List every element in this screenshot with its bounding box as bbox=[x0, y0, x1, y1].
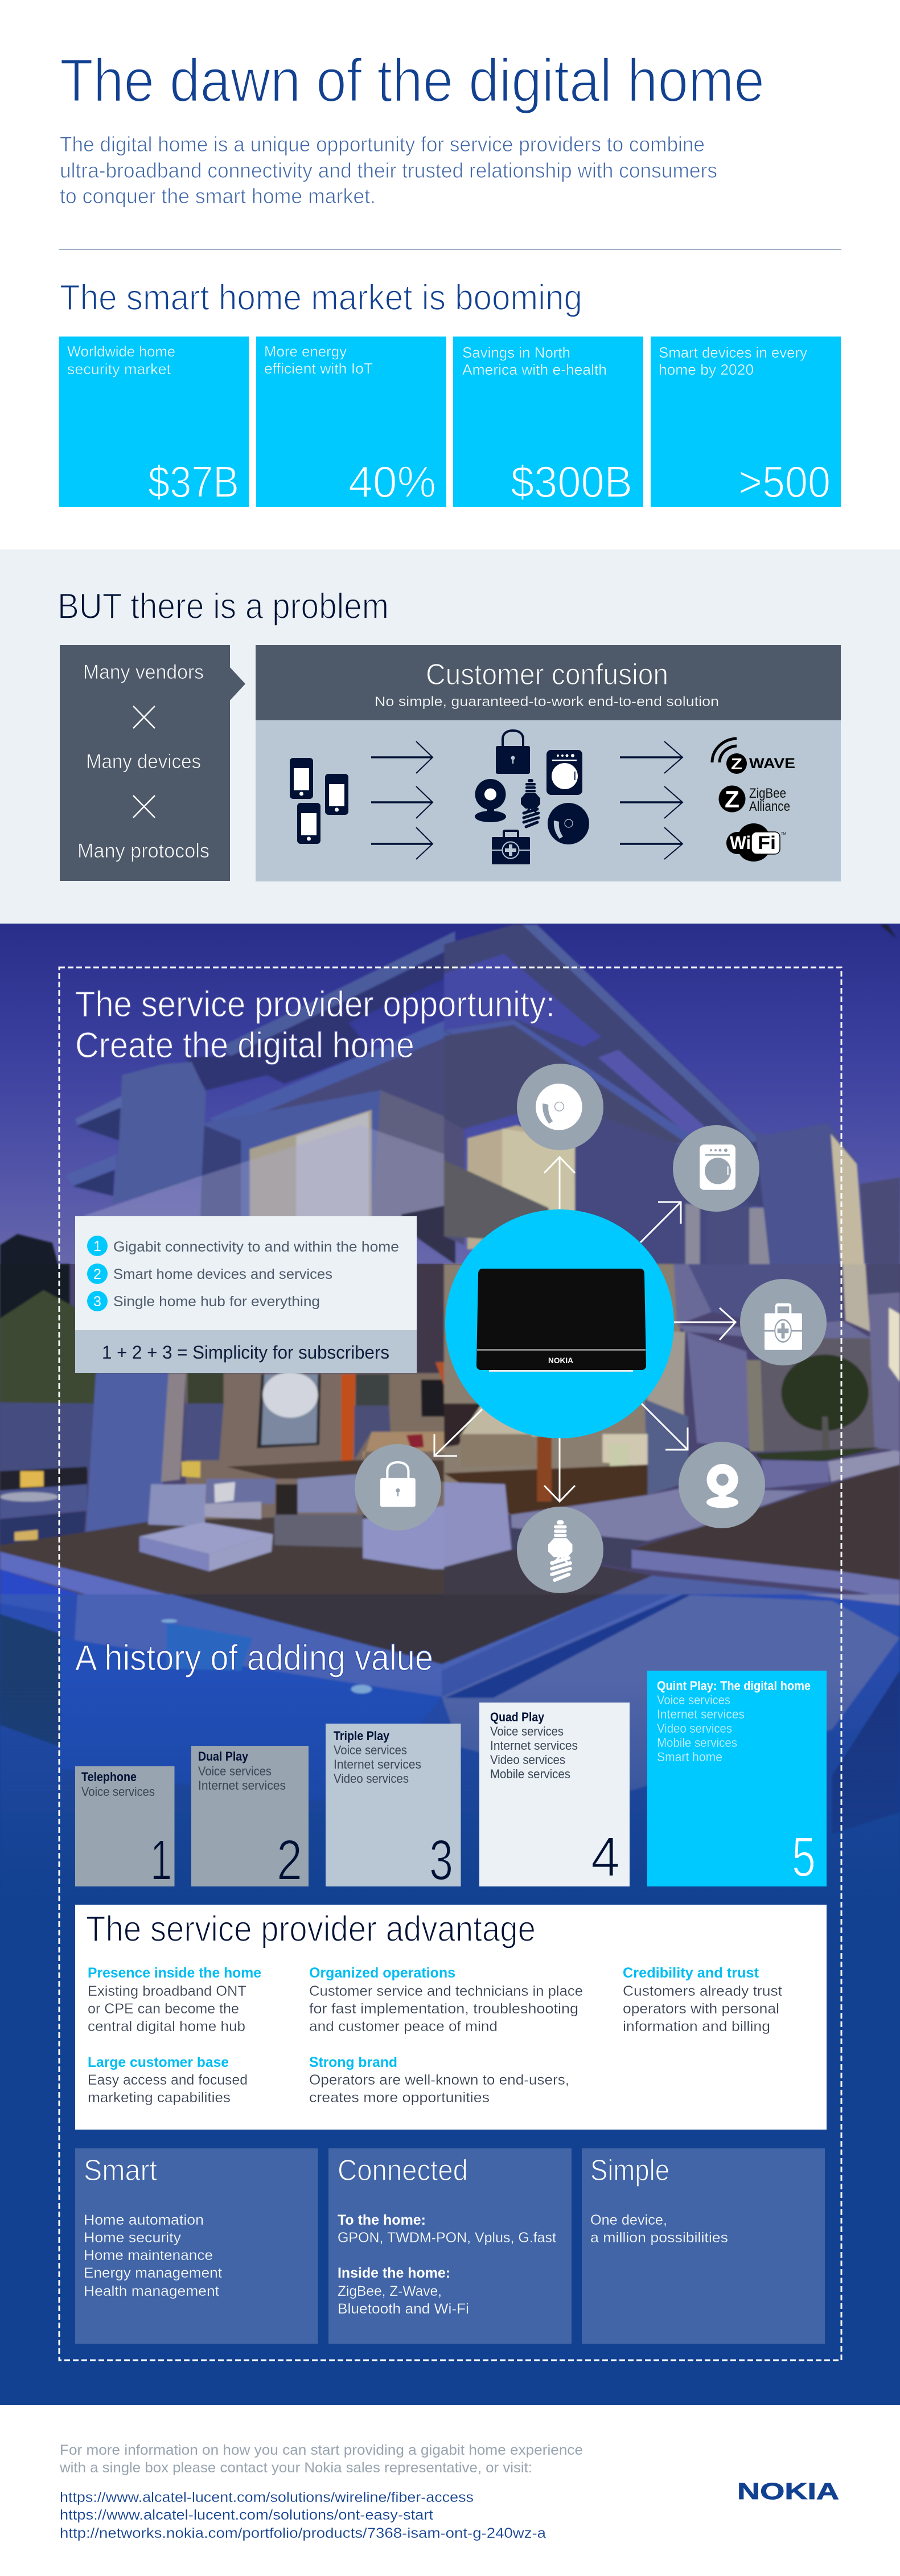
item: organized operations: and customer peace of mind bbox=[309, 2019, 498, 2034]
list item 2: Smart home devices and services bbox=[113, 1266, 332, 1282]
step 2: dual play: Internet services bbox=[198, 1778, 286, 1792]
tile: energy: More energy bbox=[264, 343, 347, 360]
heading: history of adding value: A history of adding value bbox=[75, 1638, 433, 1678]
item: credibility and trust: Customers already trust bbox=[623, 1983, 782, 1999]
heading: advantage: The service provider advantage bbox=[86, 1909, 536, 1949]
panel: simple: One device, bbox=[590, 2212, 667, 2228]
list item 3 bbox=[87, 1291, 320, 1311]
step 4: quad play: Voice services bbox=[490, 1724, 564, 1738]
icon: phones bbox=[290, 758, 348, 844]
logo: ZigBee Alliance bbox=[718, 786, 790, 814]
step 3: triple play bbox=[326, 1724, 461, 1892]
step 5: quint play: Mobile services bbox=[657, 1736, 737, 1750]
step 3: triple play: Video services bbox=[334, 1771, 409, 1786]
step 1: telephone: Telephone bbox=[81, 1770, 137, 1784]
step 4: quad play: Internet services bbox=[490, 1738, 578, 1753]
item: organized operations bbox=[309, 1965, 583, 2034]
item: large customer base: Easy access and focused bbox=[88, 2072, 248, 2088]
step 5: quint play: Quint Play: The digital home bbox=[657, 1679, 811, 1693]
footer: links: https://www.alcatel-lucent.com/solutions/wireline/fiber-access bbox=[60, 2489, 474, 2505]
item: credibility and trust bbox=[623, 1965, 782, 2034]
panel: connected: To the home: bbox=[338, 2212, 426, 2228]
box: many vendors, devices, protocols: Many devices bbox=[86, 750, 201, 773]
step 1: telephone bbox=[75, 1766, 174, 1892]
panel: connected: Inside the home: bbox=[338, 2265, 450, 2281]
icon: medical kit bbox=[740, 1279, 827, 1365]
footer: contact note: For more information on how you can start providing a gigabit home experience bbox=[60, 2442, 583, 2458]
step 1: telephone: 1 bbox=[150, 1828, 172, 1892]
tile: security market: security market bbox=[67, 360, 171, 378]
panel: smart: Smart bbox=[84, 2154, 158, 2187]
panel: smart: Health management bbox=[84, 2283, 219, 2299]
item: credibility and trust: Credibility and trust bbox=[623, 1965, 759, 1981]
step 5: quint play: Smart home bbox=[657, 1750, 722, 1764]
diagram: vendors, devices and protocols bbox=[256, 720, 841, 881]
intro paragraph: The digital home is a unique opportunity for service providers to combine bbox=[60, 133, 705, 156]
title: The dawn of the digital home bbox=[60, 46, 765, 114]
tile: smart devices: Smart devices in every bbox=[659, 344, 807, 361]
logo: ZigBee Alliance: ZigBee bbox=[749, 786, 786, 801]
tile: security market bbox=[59, 337, 249, 507]
item: large customer base bbox=[88, 2054, 248, 2106]
item: presence inside the home: Existing broadband ONT bbox=[88, 1983, 246, 1999]
step 5: quint play bbox=[647, 1671, 827, 1888]
intro paragraph bbox=[60, 133, 717, 208]
tile: smart devices: >500 bbox=[738, 457, 831, 507]
item: credibility and trust: operators with personal bbox=[623, 2001, 779, 2017]
router device: NOKIA bbox=[548, 1356, 573, 1365]
panel: smart: Energy management bbox=[84, 2265, 222, 2281]
step 4: quad play: Video services bbox=[490, 1753, 565, 1767]
footer: contact note: with a single box please contact your Nokia sales representative, or visit: bbox=[59, 2460, 532, 2476]
chart: stepped service plays bbox=[75, 1671, 827, 1892]
heading: service provider opportunity bbox=[75, 985, 555, 1065]
intro paragraph: ultra-broadband connectivity and their trusted relationship with consumers bbox=[60, 159, 717, 182]
list item 3: 3 bbox=[93, 1294, 101, 1310]
item: large customer base: marketing capabilities bbox=[88, 2090, 231, 2106]
icon: washing machine bbox=[673, 1125, 759, 1212]
icon: webcam bbox=[679, 1442, 765, 1528]
box: customer confusion header: Customer confusion bbox=[426, 658, 668, 691]
logo: Z-Wave: WAVE bbox=[749, 756, 795, 772]
list item 1: Gigabit connectivity to and within the home bbox=[113, 1239, 399, 1255]
logo: Wi-Fi: TM bbox=[781, 832, 786, 836]
logo: Nokia: NOKIA bbox=[737, 2478, 839, 2504]
footer: links bbox=[60, 2489, 546, 2541]
step 4: quad play: 4 bbox=[591, 1826, 620, 1888]
panel: connected: ZigBee, Z-Wave, bbox=[338, 2283, 442, 2299]
step 3: triple play: Voice services bbox=[334, 1743, 407, 1757]
panel: connected bbox=[328, 2148, 572, 2344]
icon: light bulb bbox=[517, 1507, 603, 1593]
photo background: modern house at dusk with pool bbox=[0, 924, 900, 2405]
step 2: dual play bbox=[191, 1746, 309, 1892]
intro paragraph: to conquer the smart home market. bbox=[60, 184, 376, 208]
item: credibility and trust: information and billing bbox=[623, 2019, 770, 2034]
item: strong brand: Operators are well-known to end-users, bbox=[309, 2072, 569, 2088]
tile: energy: 40% bbox=[348, 457, 436, 507]
list item 1: 1 bbox=[93, 1238, 101, 1254]
list item 1 bbox=[87, 1236, 399, 1256]
step 2: dual play: Voice services bbox=[198, 1764, 272, 1778]
logo: ZigBee Alliance: Alliance bbox=[749, 799, 790, 814]
step 2: dual play: 2 bbox=[277, 1828, 302, 1892]
step 3: triple play: 3 bbox=[429, 1828, 453, 1892]
step 4: quad play: Quad Play bbox=[490, 1710, 545, 1724]
step 3: triple play: Triple Play bbox=[334, 1729, 390, 1743]
step 5: quint play: Voice services bbox=[657, 1693, 730, 1707]
item: organized operations: Customer service and technicians in place bbox=[309, 1983, 583, 1999]
logo: ZigBee Alliance: Z bbox=[725, 786, 739, 813]
list item 3: Single home hub for everything bbox=[113, 1294, 320, 1310]
panel: connected: Connected bbox=[338, 2154, 468, 2187]
item: presence inside the home: or CPE can become the bbox=[88, 2001, 239, 2017]
panel: simple bbox=[582, 2148, 825, 2344]
box: many vendors, devices, protocols: Many protocols bbox=[77, 840, 209, 862]
tile: e-health savings: Savings in North bbox=[462, 344, 570, 361]
hub circle with router bbox=[445, 1209, 674, 1438]
panel: connected: GPON, TWDM-PON, Vplus, G.fast bbox=[338, 2230, 556, 2246]
step 5: quint play: 5 bbox=[792, 1826, 816, 1888]
step 4: quad play bbox=[479, 1703, 630, 1888]
icons: smart home devices bbox=[475, 731, 589, 864]
panel: smart: Home automation bbox=[84, 2212, 204, 2228]
item: large customer base: Large customer base bbox=[88, 2054, 229, 2070]
step 1: telephone: Voice services bbox=[81, 1785, 155, 1799]
box: many vendors, devices, protocols bbox=[60, 645, 245, 881]
logo: Wi-Fi: Fi bbox=[758, 832, 776, 853]
item: organized operations: for fast implementation, troubleshooting bbox=[309, 2001, 578, 2017]
heading: smart home market: The smart home market is booming bbox=[60, 278, 582, 318]
step 3: triple play: Internet services bbox=[334, 1757, 421, 1771]
router device bbox=[476, 1269, 646, 1372]
panel: smart bbox=[75, 2148, 318, 2344]
tile: e-health savings: $300B bbox=[511, 457, 632, 507]
item: strong brand: Strong brand bbox=[309, 2054, 397, 2070]
tile: e-health savings: America with e-health bbox=[462, 361, 607, 378]
item: presence inside the home bbox=[88, 1965, 261, 2034]
step 4: quad play: Mobile services bbox=[490, 1767, 570, 1781]
step 5: quint play: Video services bbox=[657, 1721, 732, 1736]
panel: service provider advantage bbox=[75, 1905, 827, 2130]
tile: e-health savings bbox=[453, 337, 643, 507]
item: organized operations: Organized operations bbox=[309, 1965, 455, 1981]
arrows: hub to devices bbox=[434, 1157, 735, 1502]
dashed frame bbox=[59, 967, 841, 2360]
box: customer confusion header: No simple, guaranteed-to-work end-to-end solution bbox=[375, 694, 719, 709]
logo: Wi-Fi bbox=[726, 823, 786, 862]
panel: smart: Home maintenance bbox=[84, 2247, 213, 2263]
icon: padlock bbox=[355, 1444, 441, 1531]
list item 2 bbox=[87, 1264, 332, 1284]
tile: security market: Worldwide home bbox=[67, 343, 175, 360]
list item 2: 2 bbox=[93, 1266, 101, 1282]
heading: service provider opportunity: Create the digital home bbox=[75, 1026, 414, 1065]
panel: simple: Simple bbox=[590, 2154, 669, 2187]
arrows: phones to devices bbox=[371, 741, 433, 859]
step 5: quint play: Internet services bbox=[657, 1707, 745, 1721]
panel: problem section bbox=[0, 549, 900, 924]
tile: energy: efficient with IoT bbox=[264, 360, 373, 377]
item: strong brand bbox=[309, 2054, 569, 2106]
logo: Z-Wave bbox=[712, 739, 795, 774]
panel: simplicity list bbox=[75, 1216, 417, 1373]
tile: energy bbox=[256, 337, 446, 507]
tile: smart devices: home by 2020 bbox=[659, 361, 754, 378]
panel: connected: Bluetooth and Wi-Fi bbox=[338, 2301, 469, 2317]
footer: contact note bbox=[59, 2442, 583, 2476]
tile: smart devices bbox=[651, 337, 841, 507]
logo: Wi-Fi: Wi bbox=[730, 832, 751, 853]
heading: service provider opportunity: The service provider opportunity: bbox=[75, 985, 555, 1024]
equation: 1 + 2 + 3 = Simplicity for subscribers bbox=[102, 1342, 389, 1363]
arrows: devices to protocols bbox=[620, 741, 683, 859]
step 2: dual play: Dual Play bbox=[198, 1749, 249, 1763]
heading: but there is a problem: BUT there is a problem bbox=[57, 586, 389, 626]
item: presence inside the home: central digital home hub bbox=[88, 2019, 245, 2034]
panel: smart: Home security bbox=[84, 2230, 182, 2246]
box: customer confusion header bbox=[256, 645, 841, 720]
footer: links: https://www.alcatel-lucent.com/solutions/ont-easy-start bbox=[60, 2507, 433, 2523]
tile: security market: $37B bbox=[148, 457, 239, 507]
panel: simple: a million possibilities bbox=[590, 2230, 728, 2246]
logo: Z-Wave: Z bbox=[731, 755, 742, 773]
panel: market stat tiles bbox=[59, 337, 841, 507]
box: many vendors, devices, protocols: Many vendors bbox=[83, 661, 204, 683]
satellite icons: smart home devices bbox=[355, 1064, 827, 1593]
item: strong brand: creates more opportunities bbox=[309, 2090, 490, 2106]
footer: links: http://networks.nokia.com/portfolio/products/7368-isam-ont-g-240wz-a bbox=[60, 2525, 546, 2541]
icon: smoke detector bbox=[517, 1064, 603, 1150]
item: presence inside the home: Presence inside the home bbox=[88, 1965, 261, 1981]
